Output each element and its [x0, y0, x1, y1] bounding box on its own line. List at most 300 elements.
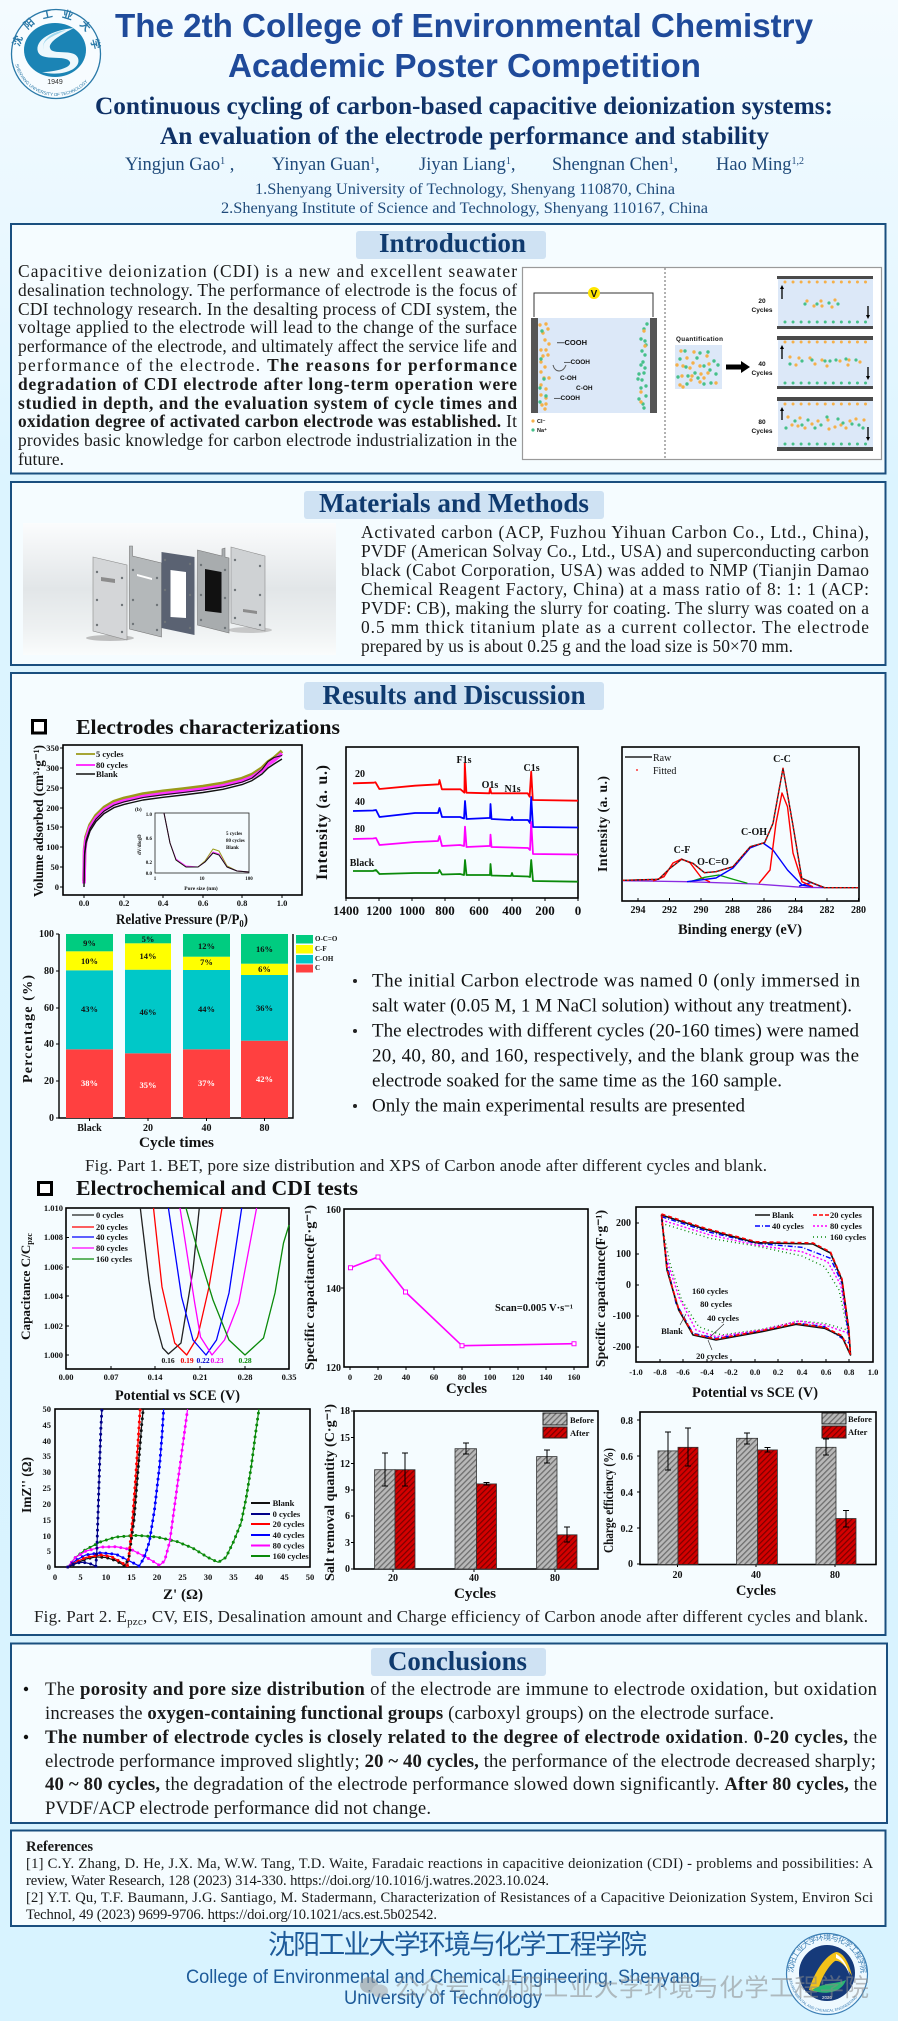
chart: XPS survey	[314, 747, 581, 918]
chart: XPS survey: 0	[575, 903, 581, 918]
chart: cyclic voltammetry: 160 cycles	[692, 1286, 729, 1296]
chart: salt removal quantity: 3	[345, 1538, 350, 1549]
chart: Epzc curves: 0.00	[59, 1372, 73, 1382]
text block: conclusions: increases the oxygen-containing functional groups (carboxyl groups) on the electrode surface.	[45, 1703, 774, 1724]
text block: materials	[361, 522, 869, 656]
chart: cyclic voltammetry: -0.8	[653, 1367, 667, 1377]
chart: stacked bars of carbon species: 44%	[198, 1004, 215, 1014]
chart: stacked bars of carbon species: 36%	[256, 1003, 273, 1013]
authors: 1	[220, 156, 225, 167]
chart: cyclic voltammetry: 80 cycles	[830, 1221, 863, 1231]
chart: salt removal quantity: 20	[388, 1573, 398, 1584]
chart: charge efficiency	[601, 1412, 876, 1599]
chart: salt removal quantity: 12	[340, 1459, 350, 1470]
text block: introduction: studied in depth, and the evaluation system of cycle times and	[18, 393, 517, 413]
panel: materials and methods	[11, 482, 886, 665]
inset: pore size distribution: (b)	[135, 806, 142, 813]
chart: BET isotherm: Relative Pressure (P/P	[116, 912, 259, 928]
chart: charge efficiency: Before	[848, 1414, 872, 1424]
chart: stacked bars of carbon species: 80	[44, 966, 54, 977]
chart: charge efficiency: Charge efficiency (%)	[601, 1448, 616, 1553]
chart: XPS survey: 20	[355, 769, 365, 780]
inset: pore size distribution: 1	[154, 877, 157, 882]
chart: EIS Nyquist: 30	[204, 1572, 212, 1582]
chart: EIS Nyquist: 20 cycles	[273, 1519, 305, 1529]
chart: cyclic voltammetry: -100	[613, 1311, 631, 1322]
title	[115, 7, 814, 84]
chart: Epzc curves: 0.14	[148, 1372, 163, 1382]
chart: C1s XPS: 284	[788, 905, 803, 916]
caption: figure part 2: Fig. Part 2. E	[34, 1607, 127, 1626]
chart: C1s XPS: Fitted	[653, 766, 676, 777]
chart: stacked bars of carbon species: 35%	[140, 1080, 156, 1090]
chart: EIS Nyquist: 25	[178, 1572, 187, 1582]
chart: EIS Nyquist: 0 cycles	[273, 1509, 301, 1519]
chart: Epzc curves: Potential vs SCE (V)	[115, 1388, 240, 1404]
logo: college seal	[786, 1932, 868, 2016]
chart: specific capacitance vs cycles: 100	[484, 1372, 496, 1382]
chart: cyclic voltammetry: 0.8	[844, 1367, 854, 1377]
chart: stacked bars of carbon species: C	[315, 964, 320, 972]
text block: sample naming bullets: salt water (0.05 M, 1 M NaCl solution) without any treatment).	[372, 996, 852, 1016]
chart: cyclic voltammetry: Blank	[772, 1210, 794, 1220]
chart: specific capacitance vs cycles: 20	[374, 1372, 382, 1382]
chart: XPS survey: F1s	[456, 755, 472, 766]
text block: sample naming bullets: The initial Carbon electrode was named 0 (only immersed in	[372, 970, 860, 992]
chart: specific capacitance vs cycles: Scan=0.005 V·s⁻¹	[495, 1303, 573, 1314]
chart: XPS survey: N1s	[505, 784, 521, 795]
logo: university seal	[10, 8, 102, 100]
chart: stacked bars of carbon species: Black	[77, 1123, 102, 1134]
logo: university seal: 1949	[47, 79, 63, 86]
text block: introduction: desalination technology. The performance of electrode is the focus of	[18, 280, 517, 300]
chart: EIS Nyquist: 40 cycles	[273, 1530, 305, 1540]
chart: BET isotherm: 0.0	[79, 898, 89, 908]
inset: pore size distribution: 10	[200, 877, 205, 882]
chart: XPS survey: 600	[469, 903, 489, 918]
chart: cyclic voltammetry: 200	[616, 1218, 631, 1229]
chart: cyclic voltammetry: Potential vs SCE (V)	[692, 1385, 818, 1401]
chart: Epzc curves: 0.28	[238, 1372, 252, 1382]
chart: specific capacitance vs cycles	[302, 1205, 588, 1397]
chart: salt removal quantity	[322, 1404, 598, 1602]
chart: XPS survey: 400	[502, 903, 522, 918]
chart: Epzc curves: 40 cycles	[96, 1232, 129, 1242]
chart: stacked bars of carbon species: 7%	[200, 957, 213, 967]
chart: BET isotherm: 5 cycles	[96, 749, 124, 759]
chart: stacked bars of carbon species: 37%	[198, 1078, 215, 1088]
text block: introduction	[18, 261, 517, 469]
text block: introduction: degradation of CDI electrode after long-term operation were	[18, 374, 517, 394]
panel: introduction	[11, 224, 886, 474]
chart: specific capacitance vs cycles: 160	[326, 1205, 341, 1216]
text block: materials: Activated carbon (ACP, Fuzhou Yihuan Carbon Co., Ltd., China),	[361, 522, 869, 542]
chart: specific capacitance vs cycles: 160	[568, 1372, 580, 1382]
chart: BET isotherm: 0	[55, 882, 59, 892]
chart: stacked bars of carbon species: 42%	[256, 1074, 273, 1084]
chart: cyclic voltammetry: 0.0	[750, 1367, 760, 1377]
text block: sample naming bullets: 20, 40, 80, and 160, respectively, and the blank group was the	[372, 1046, 859, 1066]
chart: EIS Nyquist: 5	[47, 1546, 51, 1556]
chart: specific capacitance vs cycles: 60	[430, 1372, 438, 1382]
chart: EIS Nyquist: Z' (Ω)	[163, 1587, 203, 1603]
chart: C1s XPS: 286	[756, 905, 772, 916]
chart: XPS survey: C1s	[524, 763, 540, 774]
text block: introduction: future.	[18, 449, 64, 469]
subheading: electrochemical and CDI tests: Electrochemical and CDI tests	[76, 1176, 358, 1200]
text block: conclusions: PVDF/ACP electrode performance did not change.	[45, 1798, 431, 1819]
chart: Epzc curves: 1.006	[44, 1262, 63, 1272]
chart: EIS Nyquist: 80 cycles	[273, 1540, 305, 1550]
heading: introduction: Introduction	[379, 228, 526, 258]
chart: charge efficiency: 20	[672, 1570, 682, 1581]
chart: charge efficiency: 0.2	[620, 1524, 633, 1535]
chart: C1s XPS: C-OH	[741, 827, 767, 838]
chart: XPS survey: 40	[355, 797, 365, 808]
chart: specific capacitance vs cycles: 40	[402, 1372, 410, 1382]
chart: EIS Nyquist: 35	[42, 1451, 51, 1461]
panel: references	[11, 1830, 886, 1926]
panel: references: review, Water Research, 128 (2023) 314-330. https://doi.org/10.1016/j.watres.2023.10.024.	[26, 1873, 549, 1889]
text block: sample naming bullets: Only the main experimental results are presented	[372, 1096, 746, 1116]
figure: CDI schematic: 20	[758, 298, 766, 305]
chart: EIS Nyquist: 10	[102, 1572, 110, 1582]
text block: sample naming bullets: electrode soaked for the same time as the 160 sample.	[372, 1070, 782, 1092]
chart: XPS survey: 1400	[333, 903, 359, 918]
logo: college seal: ENVIRONMENTAL AND CHEMICAL ENGINEERING	[789, 1978, 857, 2012]
chart: BET isotherm: 300	[46, 763, 59, 773]
chart: cyclic voltammetry: 80 cycles	[700, 1299, 733, 1309]
chart: stacked bars of carbon species: Percentage (%)	[21, 975, 36, 1083]
affiliations: 1.Shenyang University of Technology, Shenyang 110870, China	[255, 181, 675, 198]
inset: pore size distribution: Blank	[226, 846, 239, 851]
chart: specific capacitance vs cycles: 80	[458, 1372, 466, 1382]
chart: EIS Nyquist: Blank	[273, 1498, 295, 1508]
heading: results and discussion: Results and Discussion	[322, 680, 586, 710]
chart: stacked bars of carbon species: 12%	[198, 941, 215, 951]
figure: CDI schematic: —COOH	[554, 395, 580, 402]
authors: 1	[669, 156, 674, 167]
footer: college name: 沈阳工业大学环境与化学工程学院	[268, 1930, 647, 1960]
figure: CDI schematic: Cl⁻	[537, 419, 546, 425]
chart: salt removal quantity: After	[570, 1428, 590, 1438]
watermark: 公众号 · 沈阳工业大学环境与化学工程学院	[395, 1974, 869, 2002]
chart: Epzc curves: 160 cycles	[96, 1254, 133, 1264]
figure: CDI schematic: C-OH	[560, 375, 577, 382]
chart: BET isotherm	[32, 743, 302, 930]
caption: figure part 1: Fig. Part 1. BET, pore size distribution and XPS of Carbon anode after different cycles and blank.	[85, 1156, 767, 1175]
chart: stacked bars of carbon species: 38%	[81, 1078, 98, 1088]
authors	[125, 155, 804, 175]
chart: C1s XPS: Intensity (a. u.)	[596, 776, 611, 872]
chart: stacked bars of carbon species: 20	[44, 1076, 54, 1087]
authors: Yinyan Guan	[272, 155, 370, 175]
chart: EIS Nyquist: 5	[78, 1572, 83, 1582]
chart: Epzc curves: 0.07	[104, 1372, 119, 1382]
chart: Epzc curves: 20 cycles	[96, 1222, 129, 1232]
chart: Epzc curves: 1.010	[44, 1203, 63, 1213]
chart: XPS survey: 800	[435, 903, 455, 918]
chart: XPS survey: 1200	[366, 903, 392, 918]
text block: introduction: CDI technology research. In the desalting process of CDI system, the	[18, 299, 517, 319]
chart: stacked bars of carbon species	[21, 929, 338, 1151]
text block: conclusions: electrode performance improved slightly; 20 ~ 40 cycles, the performance of the electrode decreased sharply;	[45, 1751, 876, 1772]
figure: CDI schematic: Cycles	[752, 370, 773, 377]
logo: college seal: 2020	[822, 1995, 833, 2000]
subtitle	[95, 93, 833, 150]
chart: Epzc curves: 0.21	[193, 1372, 207, 1382]
logo: college seal: 沈阳工业大学环境与化学工程学院	[787, 1934, 867, 1974]
chart: XPS survey: O1s	[482, 780, 498, 791]
chart: BET isotherm: 0.6	[198, 898, 208, 908]
chart: Epzc curves: 1.000	[44, 1350, 63, 1360]
chart: cyclic voltammetry: Specific capacitance(F·g⁻¹)	[593, 1210, 608, 1367]
chart: salt removal quantity: 6	[345, 1511, 350, 1522]
chart: EIS Nyquist	[20, 1404, 314, 1603]
chart: XPS survey: 80	[355, 824, 365, 835]
figure: CDI schematic	[522, 268, 882, 460]
chart: specific capacitance vs cycles: 140	[326, 1284, 341, 1295]
logo: university seal: SHENYANG UNIVERSITY OF TECHNOLOGY	[16, 64, 87, 96]
authors: 1	[506, 156, 511, 167]
authors: 1	[370, 156, 375, 167]
chart: C1s XPS: C-F	[674, 845, 690, 856]
logo: university seal: 沈阳工业大学	[12, 9, 101, 49]
figure: CDI schematic: 80	[758, 419, 766, 426]
chart: salt removal quantity: 18	[340, 1406, 350, 1417]
chart: cyclic voltammetry: -0.4	[700, 1367, 714, 1377]
chart: Epzc curves: 0 cycles	[96, 1210, 124, 1220]
figure: CDI schematic: Quantification	[676, 336, 723, 343]
chart: Epzc curves: 1.002	[44, 1321, 63, 1331]
chart: BET isotherm: 350	[46, 743, 59, 753]
subheading: electrodes characterizations: Electrodes characterizations	[76, 715, 340, 739]
caption: figure part 2: pzc	[127, 1616, 143, 1628]
chart: salt removal quantity: 0	[345, 1564, 350, 1575]
text block: conclusions: The porosity and pore size distribution of the electrode are immune to electrode oxidation, but oxidation	[45, 1679, 878, 1700]
affiliations: 2.Shenyang Institute of Science and Technology, Shenyang 110167, China	[221, 200, 708, 217]
chart: EIS Nyquist: 50	[306, 1572, 314, 1582]
chart: C1s XPS: C-C	[773, 754, 791, 765]
chart: cyclic voltammetry: 0.2	[773, 1367, 783, 1377]
text block: materials: PVDF: CB), making the slurry for coating. The slurry was coated on a	[361, 598, 869, 618]
chart: XPS survey: Black	[350, 858, 375, 869]
chart: cyclic voltammetry: -1.0	[629, 1367, 643, 1377]
chart: cyclic voltammetry: 20 cycles	[830, 1210, 863, 1220]
chart: cyclic voltammetry: -0.2	[724, 1367, 738, 1377]
panel: references: [1] C.Y. Zhang, D. He, J.X. Ma, W.W. Tang, T.D. Waite, Faradaic reactions in capacitive deionization (CDI) - problems and possibilities: A	[26, 1856, 873, 1872]
chart: salt removal quantity: 80	[550, 1573, 560, 1584]
chart: cyclic voltammetry: 0.6	[821, 1367, 831, 1377]
heading: materials and methods: Materials and Methods	[319, 488, 589, 518]
chart: specific capacitance vs cycles: Specific capacitance(F·g⁻¹)	[302, 1205, 317, 1370]
panel: conclusions	[11, 1644, 887, 1823]
chart: XPS survey: 1000	[399, 903, 425, 918]
chart: cyclic voltammetry: 100	[616, 1249, 631, 1260]
chart: EIS Nyquist: 20	[153, 1572, 161, 1582]
chart: Epzc curves: 0.22	[196, 1356, 210, 1365]
figure: CDI schematic: V	[591, 289, 598, 300]
chart: stacked bars of carbon species: 20	[143, 1123, 153, 1134]
chart: BET isotherm: )	[244, 912, 248, 928]
chart: cyclic voltammetry: 40 cycles	[772, 1221, 805, 1231]
chart: EIS Nyquist: 160 cycles	[273, 1551, 309, 1561]
text block: conclusions: The number of electrode cycles is closely related to the degree of electrode oxidation. 0-20 cycles, the	[45, 1727, 877, 1748]
chart: Epzc curves: Capacitance C/C	[18, 1246, 33, 1340]
chart: stacked bars of carbon species: 100	[39, 929, 54, 940]
chart: Epzc curves: 80 cycles	[96, 1243, 129, 1253]
chart: salt removal quantity: Cycles	[454, 1586, 496, 1602]
figure: CDI schematic: Cycles	[752, 428, 773, 435]
chart: charge efficiency: After	[848, 1427, 868, 1437]
chart: cyclic voltammetry: 20 cycles	[696, 1351, 729, 1361]
chart: stacked bars of carbon species: 9%	[83, 938, 96, 948]
chart: EIS Nyquist: 40	[255, 1572, 263, 1582]
chart: charge efficiency: 0	[628, 1559, 633, 1570]
text block: introduction: oxidation degree of activated carbon electrode was established. It	[18, 411, 517, 431]
chart: BET isotherm: 100	[46, 842, 59, 852]
chart: stacked bars of carbon species: 5%	[142, 934, 154, 944]
chart: specific capacitance vs cycles: 140	[540, 1372, 552, 1382]
authors: ,	[674, 155, 678, 175]
figure: CDI schematic: Cycles	[752, 307, 773, 314]
authors: Hao Ming	[716, 155, 792, 175]
figure: CDI schematic: 40	[758, 361, 766, 368]
chart: stacked bars of carbon species: 40	[202, 1123, 212, 1134]
chart: specific capacitance vs cycles: 120	[326, 1363, 341, 1374]
figure: CDI schematic: Na⁺	[537, 427, 547, 434]
chart: Epzc curves: 0.19	[180, 1356, 194, 1365]
chart: cyclic voltammetry: 1.0	[868, 1367, 878, 1377]
chart: Epzc curves: 0.28	[238, 1356, 252, 1365]
chart: stacked bars of carbon species: 43%	[81, 1004, 98, 1014]
chart: EIS Nyquist: 15	[127, 1572, 136, 1582]
authors: ,	[375, 155, 380, 175]
inset: pore size distribution: 80 cycles	[226, 839, 245, 844]
figure: CDI schematic: —COOH	[564, 359, 590, 366]
figure: CDI schematic: C-OH	[576, 385, 593, 392]
chart: salt removal quantity: 40	[469, 1573, 479, 1584]
inset: pore size distribution: 1.0	[146, 813, 152, 818]
panel: references: [2] Y.T. Qu, T.F. Baumann, J.G. Santiago, M. Stadermann, Characterization of Resistances of a Capacitive Deionization System, Environ Sci	[26, 1890, 873, 1906]
chart: stacked bars of carbon species: 16%	[256, 944, 273, 954]
chart: charge efficiency: 40	[751, 1570, 761, 1581]
chart: C1s XPS: 294	[630, 905, 646, 916]
inset: pore size distribution: Pore size (nm)	[184, 885, 218, 892]
chart: C1s XPS: 290	[694, 905, 708, 916]
chart: EIS Nyquist: 45	[42, 1420, 51, 1430]
chart: cyclic voltammetry: 40 cycles	[707, 1313, 740, 1323]
footer: college name: College of Environmental and Chemical Engineering, Shenyang	[186, 1967, 700, 1988]
inset: pore size distribution: 5 cycles	[226, 832, 242, 837]
chart: charge efficiency: Cycles	[736, 1583, 776, 1599]
chart: cyclic voltammetry: 0	[626, 1280, 631, 1291]
text block: introduction: performance of the electrode, and ultimately affect the service life and	[18, 336, 517, 356]
text block: materials: prepared by us is about 0.25 g and the load size is 50×70 mm.	[361, 636, 793, 656]
chart: charge efficiency: 80	[830, 1570, 840, 1581]
chart: BET isotherm: 1.0	[277, 898, 287, 908]
chart: salt removal quantity: 9	[345, 1485, 350, 1496]
chart: stacked bars of carbon species: C-OH	[315, 955, 334, 963]
chart: specific capacitance vs cycles: Cycles	[446, 1381, 487, 1397]
chart: salt removal quantity: Salt removal quantity (C·g⁻¹)	[322, 1404, 337, 1581]
chart: stacked bars of carbon species: 40	[44, 1039, 54, 1050]
chart: Epzc curves: 0.23	[210, 1356, 224, 1365]
chart: Epzc curves: 1.008	[44, 1232, 63, 1242]
footer: college name	[186, 1930, 700, 2009]
authors: 1,2	[792, 156, 804, 167]
chart: EIS Nyquist: 20	[42, 1499, 51, 1509]
chart: Epzc curves: 0.35	[282, 1372, 296, 1382]
authors: ,	[511, 155, 515, 175]
chart: cyclic voltammetry: 0.4	[797, 1367, 808, 1377]
chart: charge efficiency: 0.8	[620, 1416, 633, 1427]
authors: Yingjun Gao	[125, 155, 220, 175]
chart: EIS Nyquist: ImZ'' (Ω)	[20, 1457, 35, 1513]
inset: pore size distribution: 0.6	[146, 837, 152, 842]
chart: C1s XPS: Binding energy (eV)	[678, 922, 802, 938]
chart: EIS Nyquist: 0	[47, 1562, 51, 1572]
chart: stacked bars of carbon species: 46%	[140, 1007, 156, 1017]
chart: BET isotherm: 0.2	[119, 898, 129, 908]
chart: cyclic voltammetry: -200	[613, 1342, 631, 1353]
title: The 2th College of Environmental Chemistry	[115, 7, 814, 44]
chart: charge efficiency: 0.6	[620, 1452, 633, 1463]
chart: XPS survey: 200	[535, 903, 555, 918]
chart: EIS Nyquist: 40	[42, 1436, 51, 1446]
chart: stacked bars of carbon species: Cycle times	[139, 1135, 214, 1151]
chart: BET isotherm: Blank	[96, 769, 118, 779]
chart: salt removal quantity: Before	[570, 1415, 594, 1425]
chart: Epzc curves	[18, 1203, 296, 1404]
chart: BET isotherm: 0	[239, 919, 244, 930]
chart: BET isotherm: 0.4	[158, 898, 169, 908]
inset: pore size distribution	[135, 806, 253, 892]
chart: EIS Nyquist: 30	[42, 1467, 51, 1477]
authors: Jiyan Liang	[419, 155, 506, 175]
text block: introduction: performance of the electrode. The reasons for performance	[18, 355, 517, 375]
chart: XPS survey: Intensity (a. u.)	[314, 765, 331, 880]
chart: BET isotherm: 80 cycles	[96, 760, 129, 770]
chart: BET isotherm: 50	[50, 862, 59, 872]
text block: materials: black (Cabot Corporation, USA) was added to NMP (Tianjin Damao	[361, 560, 869, 580]
chart: EIS Nyquist: 15	[42, 1515, 51, 1525]
chart: stacked bars of carbon species: 0	[49, 1113, 54, 1124]
chart: EIS Nyquist: 50	[42, 1404, 51, 1414]
footer: college name: University of Technology	[344, 1988, 542, 2009]
text block: materials: 0.5 mm thick titanium plate as a current collector. The electrode	[361, 617, 869, 637]
panel: results and discussion	[11, 673, 886, 1635]
subtitle: Continuous cycling of carbon-based capacitive deionization systems:	[95, 93, 833, 120]
chart: stacked bars of carbon species: 14%	[140, 951, 156, 961]
text block: sample naming bullets: The electrodes with different cycles (20-160 times) were named	[372, 1020, 860, 1042]
chart: Epzc curves: 0.16	[161, 1356, 175, 1365]
chart: cyclic voltammetry: 160 cycles	[830, 1232, 867, 1242]
chart: EIS Nyquist: 10	[42, 1531, 51, 1541]
chart: BET isotherm: 200	[46, 803, 59, 813]
chart: stacked bars of carbon species: 80	[260, 1123, 270, 1134]
text block: introduction: provides basic knowledge for carbon electrode industrialization in the	[18, 430, 517, 450]
chart: stacked bars of carbon species: O-C=O	[315, 935, 338, 943]
heading: conclusions: Conclusions	[388, 1646, 527, 1676]
text block: materials: PVDF (American Solvay Co., Ltd., USA) and superconducting carbon	[361, 541, 869, 561]
chart: C1s XPS: 292	[662, 905, 677, 916]
chart: EIS Nyquist: 45	[280, 1572, 289, 1582]
inset: pore size distribution: 0.2	[146, 861, 152, 866]
authors: ,	[225, 155, 234, 175]
panel: references: References	[26, 1839, 93, 1855]
chart: salt removal quantity: 15	[340, 1433, 350, 1444]
